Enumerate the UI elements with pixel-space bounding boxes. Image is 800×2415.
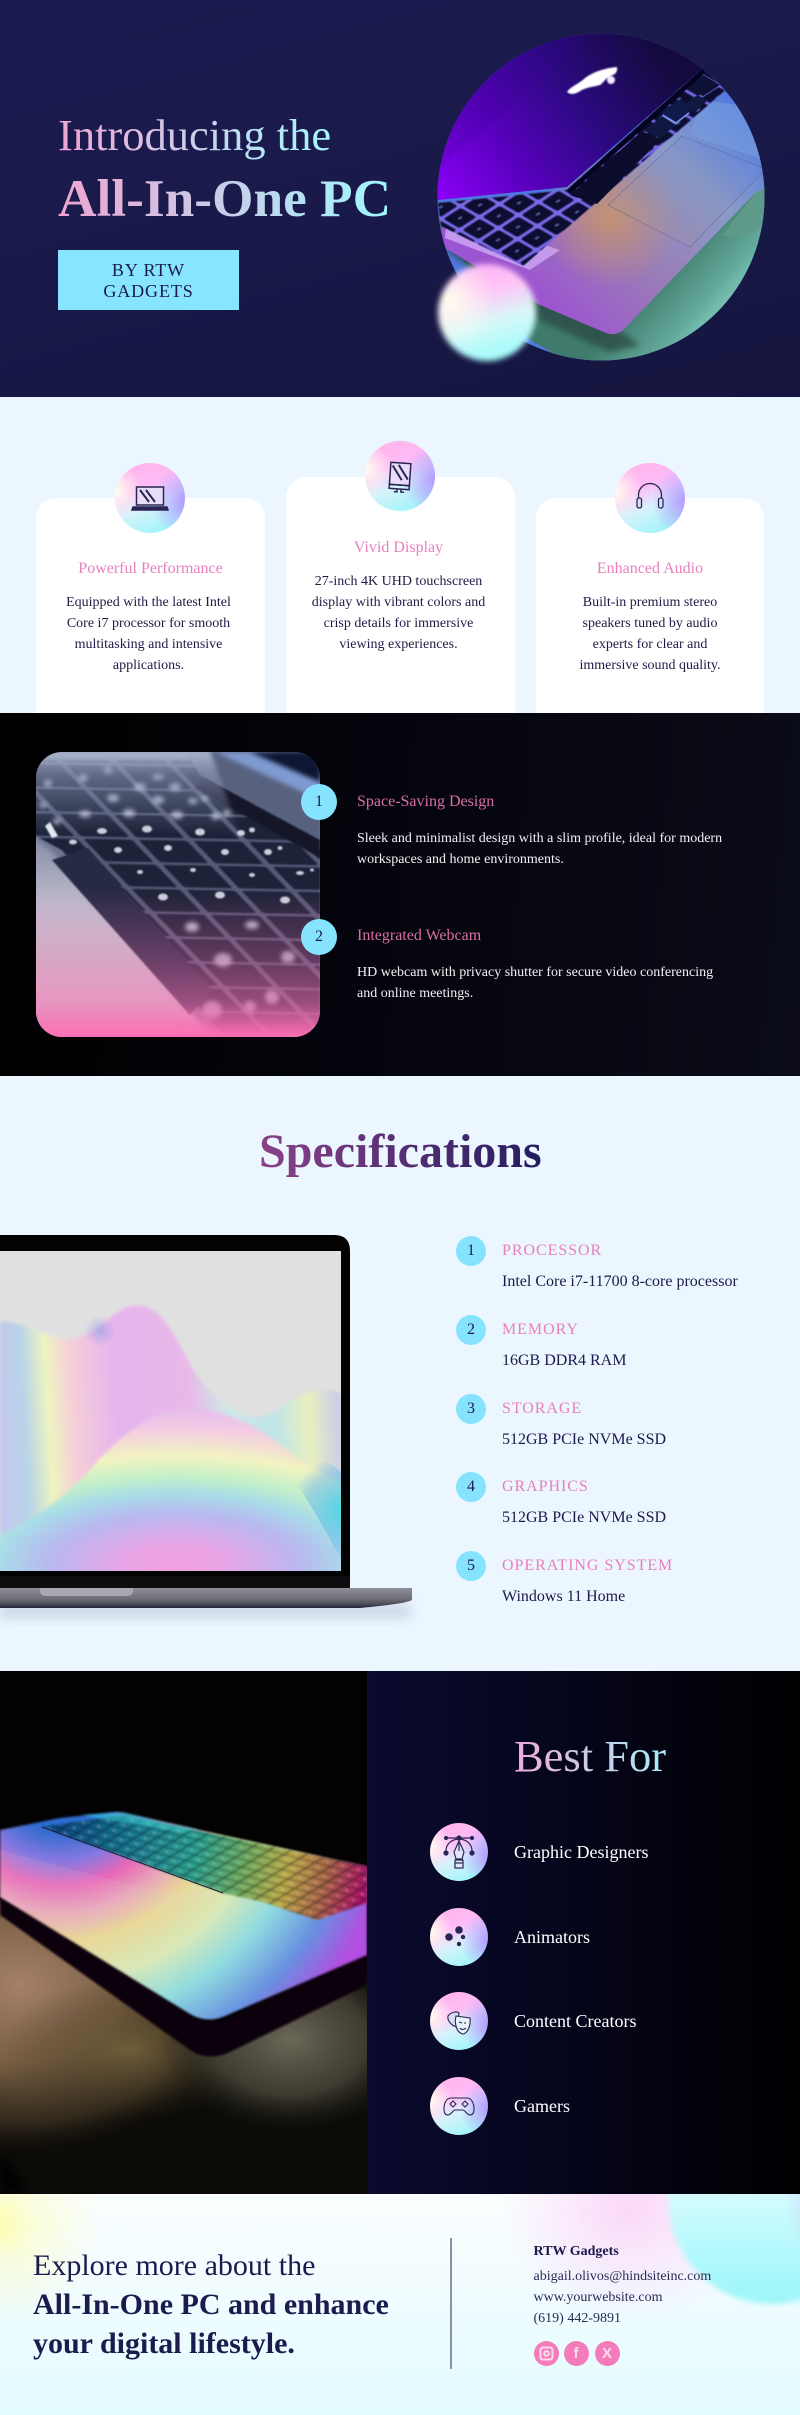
text: webcam body bbox=[357, 965, 713, 1001]
text: space-saving body: Sleek and minimalist design with a slim profile, ideal for modern bbox=[357, 831, 722, 846]
image: laptop in circle bbox=[438, 34, 764, 360]
value: 16GB DDR4 RAM bbox=[502, 1352, 626, 1369]
text: space-saving body bbox=[357, 831, 722, 867]
icon: laptop bbox=[115, 463, 185, 533]
label: Animators bbox=[514, 1927, 590, 1947]
card body: display with vibrant colors and bbox=[312, 595, 485, 610]
spec item: processor bbox=[456, 1236, 738, 1290]
text: space-saving body: workspaces and home environments. bbox=[357, 852, 564, 867]
card body: viewing experiences. bbox=[339, 637, 458, 652]
card body: immersive sound quality. bbox=[579, 658, 721, 673]
contact details: (619) 442-9891 bbox=[534, 2311, 621, 2326]
text: webcam body: HD webcam with privacy shutter for secure video conferencing bbox=[357, 965, 713, 980]
table bbox=[0, 1900, 367, 2194]
row: gamers bbox=[430, 2077, 570, 2135]
label: Gamers bbox=[514, 2096, 570, 2116]
value: Windows 11 Home bbox=[502, 1588, 625, 1605]
laptop edge bbox=[0, 1890, 367, 2057]
card body: Equipped with the latest Intel bbox=[66, 595, 231, 610]
panel: key features bbox=[0, 397, 800, 713]
label: PROCESSOR bbox=[502, 1242, 602, 1259]
lid bbox=[0, 1235, 350, 1590]
card body: applications. bbox=[113, 658, 184, 673]
headline: All-In-One PC and enhance bbox=[33, 2288, 389, 2321]
contact details bbox=[534, 2269, 712, 2326]
heading: specifications: Specifications bbox=[259, 1125, 542, 1178]
icon: facebook bbox=[564, 2341, 588, 2366]
badge: by rtw gadgets: BY RTW bbox=[112, 260, 185, 280]
label: Content Creators bbox=[514, 2011, 636, 2031]
spec item: memory bbox=[456, 1315, 626, 1369]
card body: 27-inch 4K UHD touchscreen bbox=[315, 574, 482, 589]
contact details: abigail.olivos@hindsiteinc.com bbox=[534, 2269, 711, 2284]
key glyphs blurred bbox=[39, 766, 295, 1032]
label: OPERATING SYSTEM bbox=[502, 1557, 673, 1574]
deck bbox=[0, 1812, 367, 2020]
number 4 bbox=[456, 1472, 486, 1502]
number 1: 1 bbox=[467, 1242, 475, 1259]
contact details: www.yourwebsite.com bbox=[534, 2290, 662, 2305]
contact block bbox=[534, 2244, 712, 2366]
palm rest bbox=[440, 70, 780, 334]
card body: crisp details for immersive bbox=[324, 616, 473, 631]
image: laptop with iridescent waves bbox=[0, 1235, 412, 1622]
text: webcam body: and online meetings. bbox=[357, 986, 473, 1001]
icon: instagram bbox=[534, 2341, 558, 2366]
number 5: 5 bbox=[467, 1557, 475, 1574]
vertical divider bbox=[450, 2238, 452, 2369]
icon: game controller bbox=[430, 2077, 488, 2135]
heading: space-saving design: Space-Saving Design bbox=[357, 793, 494, 810]
decorative circle bbox=[668, 2092, 800, 2304]
spec item: operating system bbox=[456, 1551, 673, 1605]
panel: best for bbox=[0, 1671, 800, 2194]
card body: experts for clear and bbox=[593, 637, 707, 652]
headline bbox=[33, 2249, 389, 2360]
card: powerful performance bbox=[36, 498, 265, 713]
number 1 bbox=[456, 1236, 486, 1266]
value: Intel Core i7-11700 8-core processor bbox=[502, 1273, 738, 1290]
icon: facebook: f bbox=[574, 2345, 578, 2362]
spec item: storage bbox=[456, 1394, 666, 1448]
trackpad shading bbox=[0, 1850, 222, 1934]
title: introducing the: Introducing the bbox=[58, 110, 331, 160]
card: enhanced audio bbox=[536, 498, 764, 713]
headline: your digital lifestyle. bbox=[33, 2327, 295, 2360]
icon: desktop monitor bbox=[365, 441, 435, 511]
base bbox=[0, 1588, 412, 1608]
number 5 bbox=[456, 1551, 486, 1581]
key glyphs sharp bbox=[69, 826, 314, 904]
number 3 bbox=[456, 1394, 486, 1424]
panel: hero bbox=[0, 0, 800, 397]
card body: speakers tuned by audio bbox=[583, 616, 717, 631]
panel: specifications bbox=[0, 1133, 738, 1622]
keyboard bbox=[438, 68, 730, 266]
icon: x: X bbox=[602, 2345, 612, 2362]
hinge band bbox=[192, 752, 320, 840]
top haze bbox=[36, 752, 235, 828]
icon: pen tool bbox=[430, 1823, 488, 1881]
panel: footer call to action bbox=[0, 2194, 800, 2415]
space bar bbox=[52, 848, 212, 1015]
headline: Explore more about the bbox=[33, 2249, 315, 2282]
number badge 1: 1 bbox=[315, 793, 323, 810]
row: graphic designers bbox=[430, 1823, 648, 1881]
number 3: 3 bbox=[467, 1400, 475, 1417]
key field bbox=[30, 760, 320, 1037]
row: content creators bbox=[430, 1992, 636, 2050]
value: 512GB PCIe NVMe SSD bbox=[502, 1509, 666, 1526]
card: vivid display bbox=[286, 477, 515, 713]
logo glow bbox=[567, 67, 617, 94]
image: laptop with rainbow reflection bbox=[0, 1671, 367, 2194]
label: MEMORY bbox=[502, 1321, 579, 1338]
spec item: graphics bbox=[456, 1472, 666, 1526]
image: keyboard close-up bbox=[36, 752, 320, 1037]
value: 512GB PCIe NVMe SSD bbox=[502, 1431, 666, 1448]
row: animators bbox=[430, 1908, 590, 1966]
number 2 bbox=[456, 1315, 486, 1345]
card body: Core i7 processor for smooth bbox=[67, 616, 230, 631]
thumb notch bbox=[40, 1588, 133, 1596]
card heading: Vivid Display bbox=[354, 539, 443, 556]
card body bbox=[579, 595, 721, 673]
palm bbox=[36, 838, 203, 1037]
company name: RTW Gadgets bbox=[534, 2244, 619, 2259]
heading: best for: Best For bbox=[514, 1731, 666, 1781]
top row strip bbox=[570, 131, 660, 204]
card heading: Powerful Performance bbox=[78, 560, 223, 577]
badge: by rtw gadgets bbox=[58, 250, 239, 310]
heading: integrated webcam: Integrated Webcam bbox=[357, 927, 481, 944]
shadow bbox=[0, 1604, 410, 1618]
icon: x bbox=[594, 2341, 620, 2366]
label: GRAPHICS bbox=[502, 1478, 589, 1495]
number 4: 4 bbox=[467, 1478, 475, 1495]
card body bbox=[66, 595, 231, 673]
panel: design features bbox=[0, 713, 800, 1076]
number badge 1 bbox=[301, 784, 337, 820]
screen bbox=[0, 1251, 351, 1581]
label: STORAGE bbox=[502, 1400, 582, 1417]
icon: theatre masks bbox=[430, 1992, 488, 2050]
label: Graphic Designers bbox=[514, 1842, 648, 1862]
card heading: Enhanced Audio bbox=[597, 560, 703, 577]
keyboard bbox=[42, 1815, 367, 1920]
number 2: 2 bbox=[467, 1321, 475, 1338]
decorative blurred sphere bbox=[438, 264, 536, 361]
number badge 2 bbox=[301, 919, 337, 955]
badge: by rtw gadgets: GADGETS bbox=[103, 281, 194, 301]
pink wash bbox=[36, 896, 320, 1037]
card body: multitasking and intensive bbox=[75, 637, 222, 652]
trackpad bbox=[608, 136, 763, 247]
palm rest underside bbox=[439, 156, 764, 360]
card body: Built-in premium stereo bbox=[583, 595, 717, 610]
card body bbox=[312, 574, 486, 652]
icon: headphones bbox=[615, 463, 685, 533]
number badge 2: 2 bbox=[315, 928, 323, 945]
icon: dots bbox=[430, 1908, 488, 1966]
lid bbox=[438, 34, 702, 200]
title: all-in-one pc: All-In-One PC bbox=[58, 169, 391, 228]
